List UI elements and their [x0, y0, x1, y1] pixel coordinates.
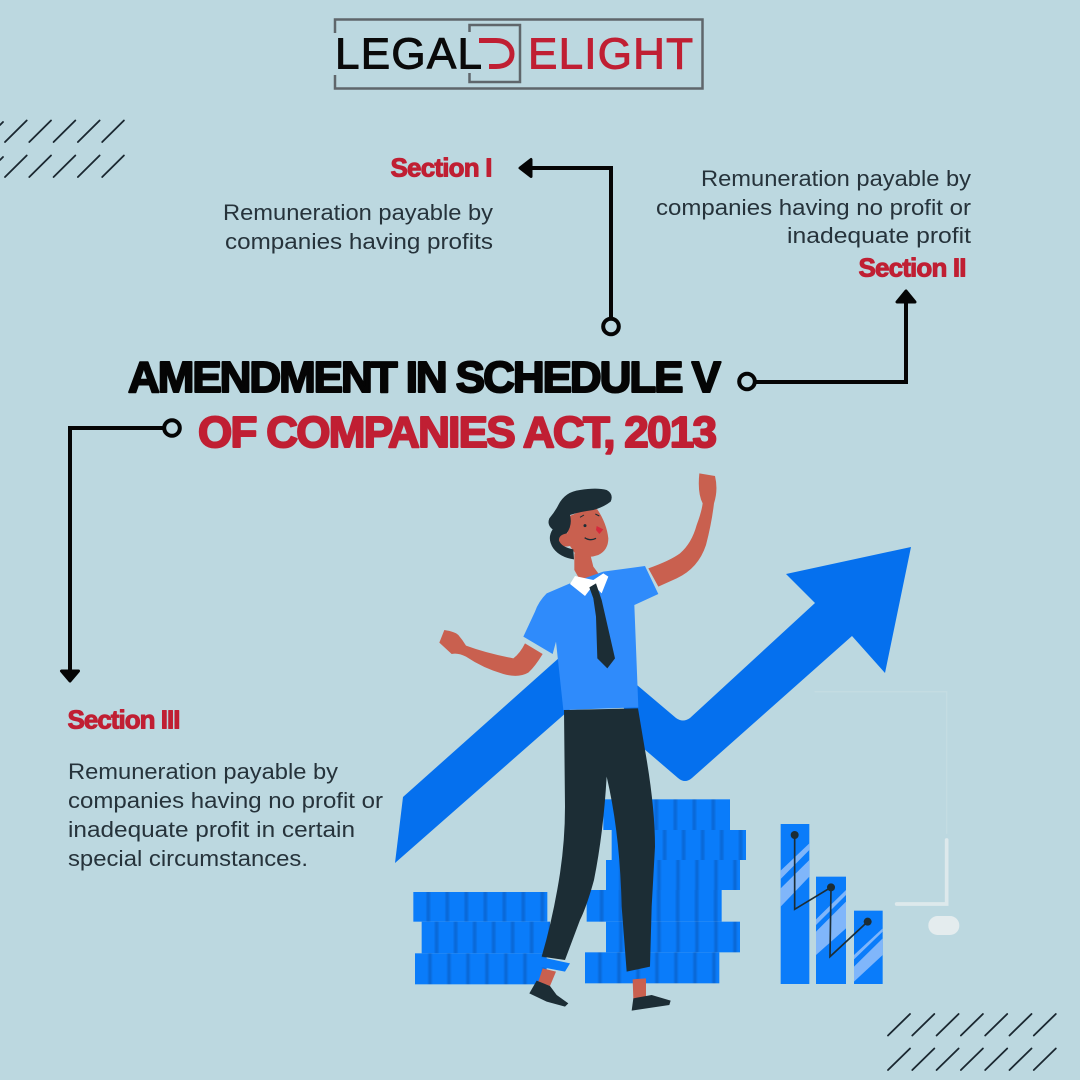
- section II description: inadequate profit: [787, 223, 972, 248]
- hair: [549, 489, 612, 559]
- logo word ELIGHT: ELIGHT: [528, 30, 693, 78]
- bar trend line: [791, 831, 872, 957]
- neck: [574, 553, 598, 582]
- section III description: special circumstances.: [68, 846, 308, 871]
- logo letter D mark: [479, 40, 512, 66]
- shirt: [523, 566, 658, 710]
- title: [128, 353, 722, 457]
- title line 2: OF COMPANIES ACT, 2013: [198, 408, 717, 457]
- logo word LEGAL: LEGAL: [335, 30, 482, 78]
- section III block: [68, 704, 384, 871]
- trousers: [542, 708, 655, 972]
- arrow to section II: [739, 291, 915, 389]
- illustration: man legs: [529, 708, 671, 1011]
- section III description: inadequate profit in certain: [68, 817, 355, 842]
- illustration: coin stacks: [413, 799, 746, 984]
- lowered arm: [439, 630, 543, 676]
- illustration: rising arrow: [395, 547, 911, 863]
- section III description: Remuneration payable by: [68, 759, 339, 784]
- section I block: [223, 152, 494, 254]
- decorative stripes bottom right: [888, 1014, 1056, 1070]
- arrow to section III: [62, 420, 180, 681]
- section II heading: Section II: [858, 252, 966, 282]
- illustration: man upper body: [439, 473, 716, 710]
- faint white frame: [815, 692, 947, 904]
- raised arm: [648, 473, 716, 587]
- trouser cuff: [539, 957, 570, 972]
- tie: [589, 583, 615, 668]
- decorative stripes top left: [0, 120, 124, 177]
- left coin stack: [413, 892, 550, 984]
- logo: Legal Delight: [335, 20, 702, 88]
- logo frame: [335, 20, 702, 88]
- white pill: [928, 916, 959, 935]
- socks: [538, 968, 646, 999]
- illustration: bar chart: [781, 692, 959, 984]
- section II description: companies having no profit or: [656, 195, 972, 220]
- right coin stack: [585, 799, 746, 983]
- section II description: Remuneration payable by: [701, 166, 972, 191]
- shoes: [529, 981, 671, 1011]
- section I heading: Section I: [390, 152, 492, 182]
- arrow to section I: [520, 160, 619, 334]
- logo inner square: [470, 25, 520, 82]
- section II block: [656, 166, 972, 282]
- facial features: [580, 514, 603, 540]
- section III heading: Section III: [68, 704, 180, 734]
- bars: [781, 824, 883, 984]
- collar: [570, 573, 608, 596]
- section III description: companies having no profit or: [68, 788, 384, 813]
- section I description: Remuneration payable by: [223, 200, 494, 225]
- title line 1: AMENDMENT IN SCHEDULE V: [128, 353, 722, 402]
- face: [558, 509, 608, 557]
- section I description: companies having profits: [225, 229, 493, 254]
- bar highlights: [781, 843, 883, 982]
